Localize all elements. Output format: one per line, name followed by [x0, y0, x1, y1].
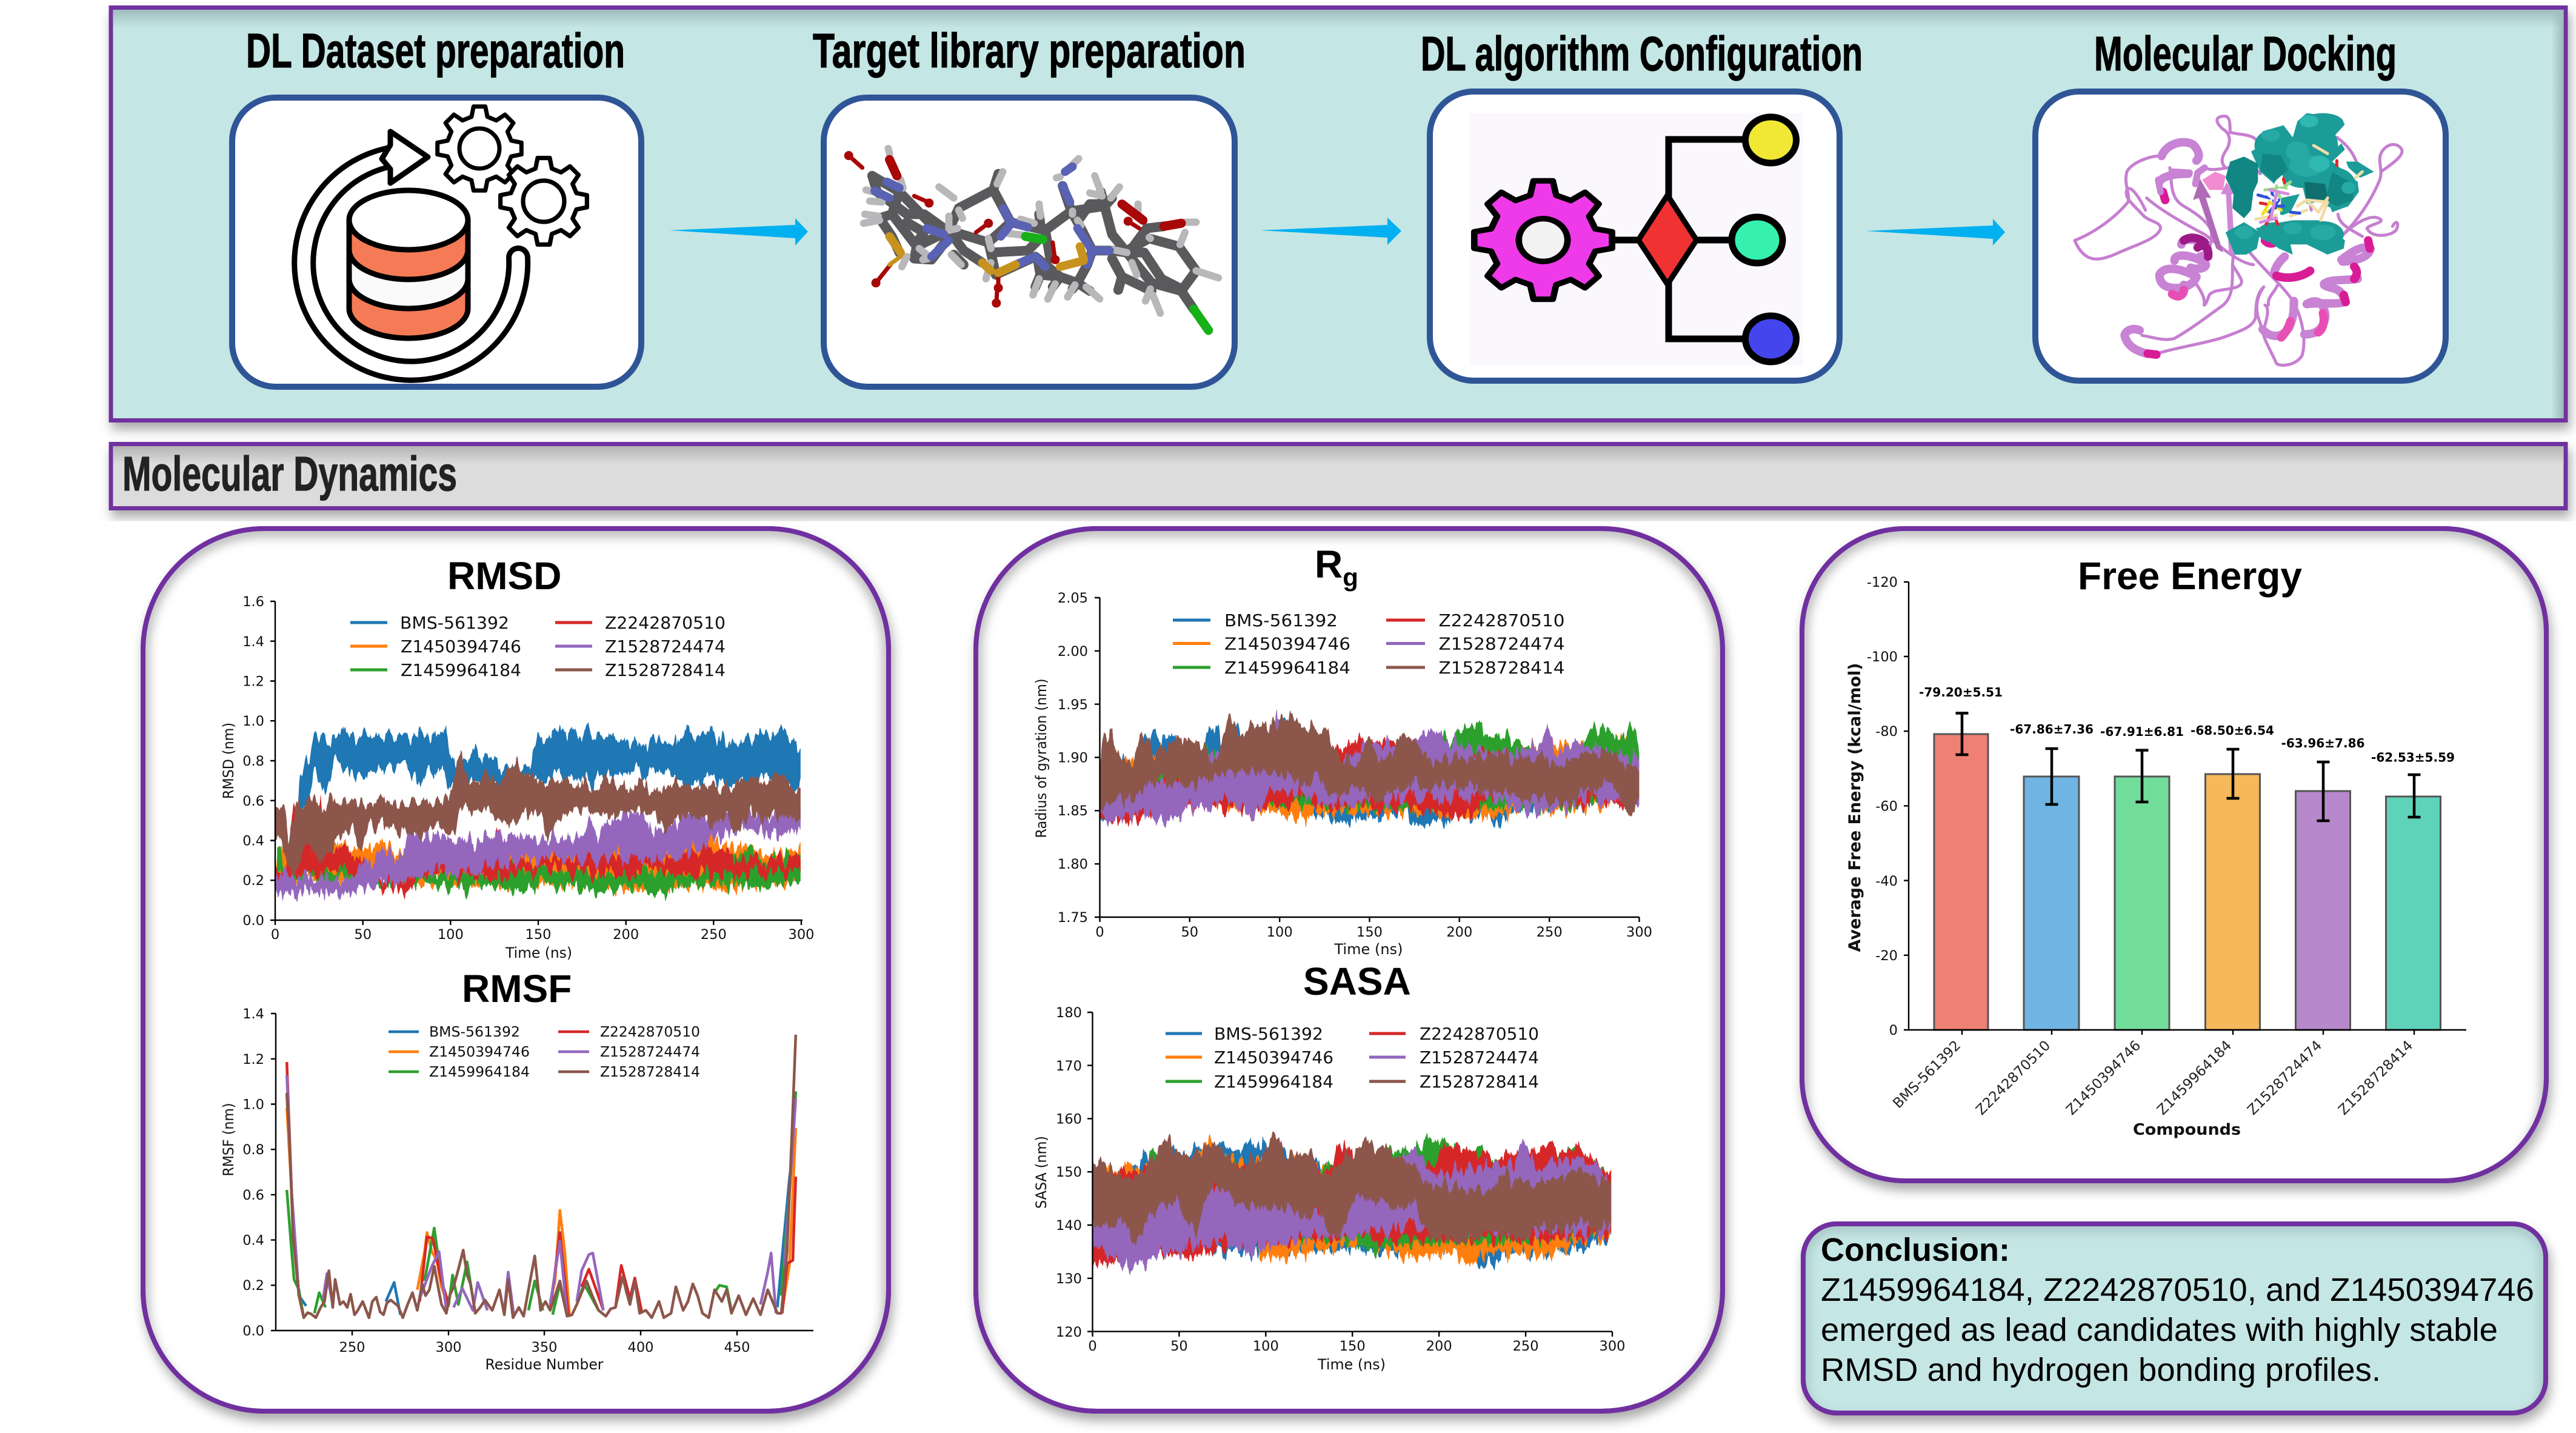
RMSD y tick labels: 0.2 [242, 873, 264, 889]
RMSF x tick labels: 400 [628, 1340, 653, 1355]
Rg y tick labels: 1.90 [1058, 750, 1088, 766]
chart: RMSD [220, 594, 814, 961]
SASA x tick labels: 50 [1170, 1338, 1188, 1354]
icon backdrop [1470, 113, 1803, 366]
free energy y tick labels: -80 [1875, 724, 1898, 740]
RMSD y tick labels: 0.6 [242, 793, 264, 809]
Rg y tick labels: 1.80 [1058, 857, 1088, 872]
card: dataset icon [232, 98, 641, 387]
bar: Z2242870510: -67.86±7.36 [2010, 722, 2094, 737]
panel: RMSD and RMSF charts [143, 529, 889, 1422]
SASA legend: Z1450394746 [1214, 1047, 1333, 1067]
heading: Molecular Docking: Molecular Docking [2094, 27, 2397, 81]
free energy compound labels [1890, 1038, 2416, 1118]
SASA x tick labels: 0 [1088, 1338, 1097, 1354]
Rg legend: Z2242870510 [1439, 610, 1565, 630]
icon: green node [1732, 217, 1783, 263]
icon: circular arrow [304, 132, 518, 371]
SASA x tick labels: 200 [1426, 1338, 1452, 1354]
docked ligand sticks [2255, 145, 2363, 224]
RMSF y tick labels: 0.6 [242, 1187, 264, 1203]
RMSD x tick labels [271, 927, 814, 943]
RMSF traces [287, 1035, 796, 1318]
arrow: library to algorithm [1260, 218, 1401, 245]
protein ribbon loops [2075, 116, 2402, 366]
SASA legend: Z2242870510 [1420, 1024, 1539, 1044]
free energy compound labels: Z1459964184 [2154, 1038, 2235, 1118]
SASA y tick labels: 160 [1056, 1112, 1082, 1127]
free energy y tick labels: -60 [1875, 799, 1898, 815]
Rg y tick labels: 1.85 [1058, 803, 1088, 819]
illustration: protein with docked ligands [2075, 113, 2402, 366]
RMSD y tick labels: 1.2 [242, 674, 264, 690]
SASA x tick labels: 250 [1513, 1338, 1539, 1354]
icon: magenta gear [1474, 181, 1612, 299]
RMSD y tick labels: 1.6 [242, 594, 264, 610]
SASA legend: Z1459964184 [1214, 1072, 1333, 1092]
free energy compound labels: Z1528724474 [2244, 1038, 2325, 1118]
card: molecular docking [2035, 92, 2446, 381]
bar: Z1528728414 [2371, 750, 2455, 1030]
panel: free energy chart [1802, 529, 2546, 1192]
Rg y tick labels: 2.05 [1058, 590, 1088, 606]
RMSF legend: Z1459964184 [429, 1063, 530, 1080]
SASA x axis title: Time (ns) [1317, 1356, 1386, 1373]
RMSD x tick labels: 0 [271, 927, 279, 943]
SASA y tick labels: 130 [1056, 1271, 1082, 1287]
RMSD legend: Z1528728414 [605, 660, 726, 680]
RMSF x axis title: Residue Number [485, 1356, 604, 1373]
Rg x tick labels: 0 [1095, 924, 1104, 940]
RMSF x tick labels: 300 [436, 1340, 461, 1355]
heading: DL Dataset preparation: DL Dataset preparation [246, 24, 625, 78]
icon: lower gear [501, 158, 587, 244]
SASA y tick labels: 150 [1056, 1164, 1082, 1180]
Rg x tick labels: 50 [1181, 924, 1198, 940]
RMSF y axis title: RMSF (nm) [220, 1103, 237, 1176]
SASA legend: Z1528724474 [1420, 1047, 1539, 1067]
heading: SASA: SASA [1303, 960, 1411, 1003]
Rg legend: Z1459964184 [1224, 658, 1350, 678]
RMSF legend [389, 1023, 700, 1080]
heading: RMSF: RMSF [462, 967, 572, 1010]
conclusion text: Z1459964184, Z2242870510, and Z1450394746 [1821, 1272, 2534, 1308]
heading: Rg: g [1343, 563, 1358, 592]
icon: decision diamond [1638, 195, 1697, 284]
RMSD legend: Z1450394746 [401, 636, 521, 656]
heading: RMSD: RMSD [447, 554, 561, 598]
RMSF legend: Z2242870510 [600, 1023, 700, 1040]
SASA x tick labels: 300 [1600, 1338, 1625, 1354]
heading: DL algorithm Configuration: DL algorithm Configuration [1421, 27, 1863, 81]
free energy y tick labels: -20 [1875, 948, 1898, 964]
chart: SASA [1033, 1005, 1625, 1373]
RMSD y tick labels: 0.4 [242, 833, 264, 849]
bar: Z1450394746 [2100, 724, 2184, 1030]
RMSD legend: Z2242870510 [605, 613, 726, 633]
RMSD y tick labels [242, 594, 264, 929]
Rg legend: Z1450394746 [1224, 634, 1350, 653]
Rg axes [1095, 598, 1639, 922]
RMSD legend: BMS-561392 [400, 613, 509, 633]
bar: BMS-561392 [1919, 685, 2003, 1030]
conclusion text: emerged as lead candidates with highly stable [1821, 1312, 2498, 1348]
RMSF y tick labels: 0.2 [242, 1278, 264, 1294]
RMSD x tick labels: 100 [438, 927, 464, 943]
heading: Rg: R [1315, 543, 1343, 586]
RMSF y tick labels: 0.8 [242, 1142, 264, 1158]
SASA x tick labels: 150 [1340, 1338, 1366, 1354]
SASA y tick labels: 170 [1056, 1058, 1082, 1074]
free energy y tick labels: -120 [1867, 575, 1898, 590]
free energy compound labels: Z2242870510 [1973, 1038, 2054, 1118]
card: ligand molecule [824, 98, 1235, 387]
RMSD legend: Z1528724474 [605, 636, 726, 656]
Rg x tick labels: 250 [1537, 924, 1563, 940]
heading: Target library preparation: Target library preparation [813, 24, 1246, 78]
icon: database cylinder [349, 190, 468, 338]
RMSF x tick labels: 250 [339, 1340, 365, 1355]
RMSD x tick labels: 250 [701, 927, 727, 943]
RMSF y tick labels: 0.4 [242, 1233, 264, 1249]
SASA axes [1087, 1012, 1612, 1337]
illustration: stick molecule [849, 149, 1218, 330]
Rg y tick labels [1058, 590, 1088, 926]
bar: Z1528724474 [2281, 736, 2365, 1030]
Rg y tick labels: 2.00 [1058, 644, 1088, 660]
free energy y tick labels: -40 [1875, 873, 1898, 889]
RMSD legend [350, 613, 726, 680]
Rg x tick labels [1095, 924, 1652, 940]
icon: yellow node [1746, 117, 1797, 163]
SASA legend: BMS-561392 [1214, 1024, 1323, 1044]
RMSD x tick labels: 150 [526, 927, 551, 943]
bar: Z2242870510 [2010, 722, 2094, 1030]
free energy y tick labels: -100 [1867, 649, 1898, 665]
RMSF x tick labels: 450 [724, 1340, 750, 1355]
RMSF legend: BMS-561392 [429, 1023, 520, 1040]
protein helix shading [2148, 192, 2370, 355]
RMSD y tick labels: 1.0 [242, 713, 264, 729]
Rg y axis title: Radius of gyration (nm) [1033, 679, 1050, 838]
RMSF x tick labels: 350 [532, 1340, 557, 1355]
RMSF y tick labels: 1.4 [242, 1006, 264, 1022]
bar: Z1450394746: -67.91±6.81 [2100, 724, 2184, 739]
free energy compound labels: BMS-561392 [1890, 1038, 1964, 1112]
free energy y tick labels [1867, 575, 1898, 1038]
Rg x tick labels: 300 [1626, 924, 1652, 940]
RMSF legend: Z1450394746 [429, 1043, 530, 1060]
arrow: algorithm to docking [1866, 219, 2005, 246]
protein beta strands [2193, 179, 2223, 253]
panel: conclusion callout [1803, 1224, 2546, 1420]
RMSD y tick labels: 0.0 [242, 913, 264, 929]
free energy axes [1904, 582, 2466, 1035]
RMSD x tick labels: 50 [354, 927, 372, 943]
chart: RMSF [220, 1006, 813, 1373]
SASA y tick labels: 140 [1056, 1218, 1082, 1234]
free energy y tick labels: 0 [1889, 1023, 1898, 1038]
connector lines [1612, 139, 1752, 339]
RMSF y tick labels: 1.0 [242, 1097, 264, 1113]
RMSD y tick labels: 1.4 [242, 634, 264, 650]
RMSF x tick labels [339, 1340, 750, 1355]
card: algorithm configuration [1430, 92, 1840, 381]
SASA legend [1166, 1024, 1539, 1092]
conclusion text [1821, 1272, 2534, 1388]
icon: blue node [1746, 316, 1797, 362]
RMSF y tick labels: 0.0 [242, 1323, 264, 1339]
Rg y tick labels: 1.75 [1058, 910, 1088, 926]
RMSD x axis title: Time (ns) [505, 944, 572, 961]
protein helices [2124, 142, 2371, 353]
Rg legend: Z1528724474 [1439, 634, 1565, 653]
SASA y tick labels: 180 [1056, 1005, 1082, 1021]
RMSF y tick labels [242, 1006, 264, 1339]
icon: upper gear [438, 107, 521, 190]
free energy compound labels: Z1450394746 [2063, 1038, 2144, 1118]
SASA y tick labels: 120 [1056, 1324, 1082, 1340]
arrow: dataset to library [670, 218, 808, 246]
SASA traces [1093, 1132, 1611, 1269]
RMSD axes [270, 601, 802, 925]
RMSD legend: Z1459964184 [401, 660, 521, 680]
Rg y tick labels: 1.95 [1058, 697, 1088, 713]
bar: BMS-561392: -79.20±5.51 [1919, 685, 2003, 700]
Rg traces [1100, 708, 1639, 827]
SASA y tick labels [1056, 1005, 1082, 1340]
Rg legend [1173, 610, 1565, 678]
bar: Z1459964184 [2191, 723, 2274, 1030]
SASA x tick labels [1088, 1338, 1625, 1354]
SASA legend: Z1528728414 [1420, 1072, 1539, 1092]
RMSF legend: Z1528728414 [600, 1063, 700, 1080]
Rg x axis title: Time (ns) [1333, 941, 1403, 958]
SASA x tick labels: 100 [1253, 1338, 1279, 1354]
panel: Rg and SASA charts [976, 529, 1723, 1422]
conclusion text: RMSD and hydrogen bonding profiles. [1821, 1352, 2381, 1388]
bar: Z1528724474: -63.96±7.86 [2281, 736, 2365, 750]
panel: workflow pipeline [111, 7, 2566, 421]
Rg x tick labels: 200 [1446, 924, 1472, 940]
RMSD x tick labels: 300 [789, 927, 814, 943]
RMSD y tick labels: 0.8 [242, 753, 264, 769]
RMSD y axis title: RMSD (nm) [220, 723, 237, 799]
RMSF axes [271, 1014, 813, 1335]
Rg x tick labels: 150 [1356, 924, 1383, 940]
RMSD traces [275, 726, 801, 895]
Rg legend: BMS-561392 [1224, 610, 1338, 630]
chart: radius of gyration [1033, 590, 1652, 958]
heading: Molecular Dynamics: Molecular Dynamics [122, 447, 457, 501]
Rg legend: Z1528728414 [1439, 658, 1565, 678]
free energy compound labels: Z1528728414 [2335, 1038, 2416, 1118]
teal binding surface [2226, 113, 2374, 255]
Rg x tick labels: 100 [1267, 924, 1293, 940]
RMSF legend: Z1528724474 [600, 1043, 700, 1060]
RMSF y tick labels: 1.2 [242, 1052, 264, 1067]
RMSD x tick labels: 200 [613, 927, 639, 943]
bar: Z1459964184: -68.50±6.54 [2191, 723, 2274, 738]
heading: Free Energy: Free Energy [2078, 554, 2302, 598]
free energy x axis title: Compounds [2133, 1121, 2241, 1139]
panel: molecular dynamics header bar [111, 444, 2566, 508]
free energy y axis title: Average Free Energy (kcal/mol) [1846, 663, 1864, 952]
bar: Z1528728414: -62.53±5.59 [2371, 750, 2455, 765]
SASA y axis title: SASA (nm) [1033, 1136, 1050, 1209]
conclusion heading: Conclusion: [1821, 1232, 2010, 1268]
